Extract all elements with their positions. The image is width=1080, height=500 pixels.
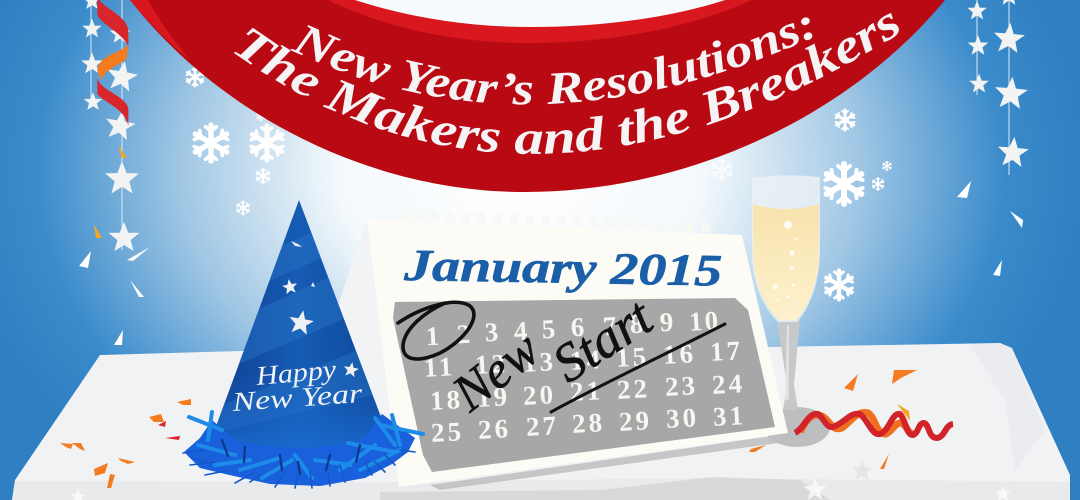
calendar dates: 26: [477, 413, 512, 445]
calendar dates: 7: [602, 311, 617, 341]
champagne: [753, 204, 819, 320]
banner: [130, 0, 945, 192]
champagne glass: [752, 175, 830, 447]
banner title: The Makers and the Breakers: [234, 13, 899, 154]
calendar dates: 17: [709, 335, 744, 367]
calendar dates: [423, 305, 747, 448]
calendar dates: 1: [425, 321, 440, 351]
handwritten note: New: New: [442, 320, 550, 423]
glass bowl: [752, 175, 820, 322]
left streamer: [97, 0, 128, 126]
calendar dates: 15: [615, 341, 650, 373]
calendar dates: 27: [525, 410, 560, 442]
calendar dates: 25: [430, 416, 465, 448]
calendar dates: 14: [569, 344, 604, 376]
calendar dates: 29: [618, 405, 653, 437]
calendar dates: 21: [569, 375, 604, 407]
table ribbon: [795, 412, 953, 438]
calendar dates: 13: [522, 346, 557, 378]
calendar dates: 2: [456, 319, 471, 349]
handwritten note: Start: Start: [542, 285, 664, 394]
handwritten circle around 1: [398, 302, 474, 359]
hat greeting: [230, 354, 364, 417]
left hanging stars: [82, 0, 139, 250]
calendar page: [367, 219, 788, 487]
calendar dates: 24: [711, 368, 746, 400]
handwritten underline: [551, 324, 725, 412]
calendar dates: 12: [474, 348, 509, 380]
hat lower glow: [217, 388, 380, 448]
calendar dates: 4: [513, 316, 528, 346]
calendar: [338, 210, 788, 487]
right hanging stars: [968, 0, 1029, 175]
calendar dates: 9: [659, 307, 674, 337]
calendar binding: [397, 210, 710, 232]
calendar grid: [393, 298, 775, 472]
calendar dates: 30: [665, 402, 700, 434]
party hat: [183, 200, 423, 488]
hat greeting: New Year: [230, 378, 364, 417]
glass base: [764, 407, 830, 447]
calendar dates: 23: [664, 370, 699, 402]
calendar dates: 18: [429, 384, 464, 416]
hat greeting: Happy: [254, 354, 337, 391]
bubbles: [772, 221, 798, 305]
table: [12, 343, 1070, 500]
calendar dates: 20: [522, 379, 557, 411]
calendar dates: 22: [616, 373, 651, 405]
calendar dates: 8: [629, 309, 644, 339]
snowflakes: [187, 68, 891, 300]
calendar back panel: [338, 219, 430, 460]
tinsel trim: [183, 412, 423, 488]
banner title: New Year’s Resolutions:: [290, 17, 812, 105]
calendar dates: 19: [476, 381, 511, 413]
hat stripes: [217, 233, 373, 430]
calendar dates: 28: [571, 407, 606, 439]
hat cone: [214, 200, 384, 454]
table confetti: [60, 370, 917, 488]
calendar month heading: January 2015: [403, 240, 723, 296]
hat stars: [281, 241, 360, 378]
falling confetti: [79, 145, 1023, 345]
glass stem: [777, 320, 800, 410]
calendar dates: 10: [688, 305, 721, 337]
faint table stars: [70, 460, 1011, 500]
calendar dates: 11: [423, 351, 456, 383]
calendar dates: 3: [484, 317, 499, 347]
calendar dates: 6: [570, 312, 585, 342]
calendar dates: 31: [712, 400, 747, 432]
calendar dates: 16: [662, 338, 697, 370]
calendar dates: 5: [541, 314, 556, 344]
